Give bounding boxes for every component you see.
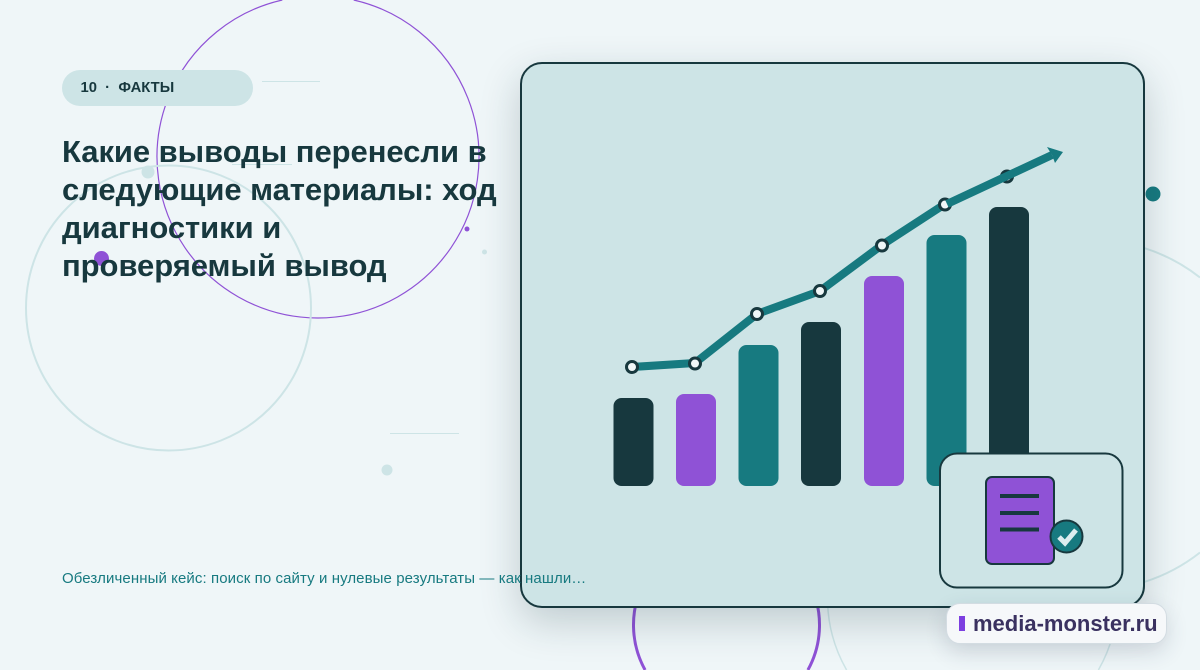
title: диагностики и bbox=[62, 210, 281, 245]
brand mark bbox=[959, 616, 965, 631]
bars bbox=[614, 207, 1029, 486]
title: Какие выводы перенесли в bbox=[62, 134, 487, 169]
panel: document card bbox=[939, 452, 1124, 588]
title: следующие материалы: ход bbox=[62, 172, 497, 207]
subtitle: Обезличенный кейс: поиск по сайту и нулевые результаты — как нашли… bbox=[62, 570, 586, 586]
icon: document bbox=[986, 477, 1054, 564]
brand badge bbox=[946, 603, 1167, 644]
growth line with markers bbox=[626, 147, 1063, 372]
badge: 10 facts: 10 · ФАКТЫ bbox=[80, 80, 174, 96]
title bbox=[62, 134, 497, 283]
brand name: media-monster.ru bbox=[973, 611, 1158, 636]
chart: bars and growth line bbox=[614, 147, 1063, 486]
icon: check badge bbox=[1050, 520, 1082, 552]
title: проверяемый вывод bbox=[62, 248, 387, 283]
panel: chart card bbox=[520, 62, 1145, 608]
badge: 10 facts bbox=[62, 70, 252, 106]
